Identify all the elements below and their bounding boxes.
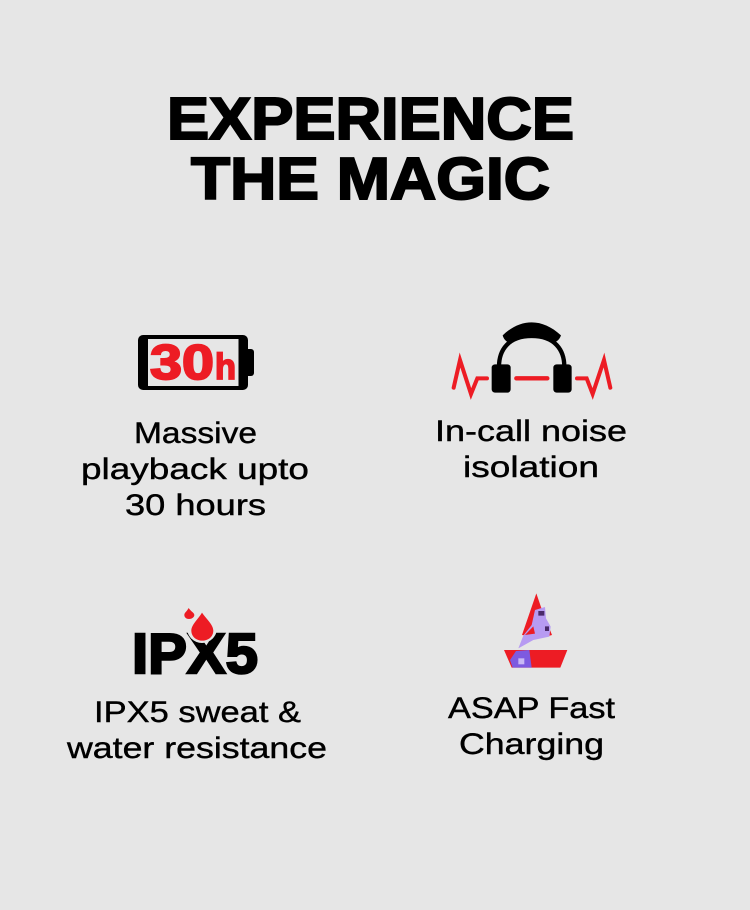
icon: battery 30h: 30 bbox=[150, 336, 214, 390]
text: in-call noise isolation bbox=[435, 415, 627, 484]
text: in-call noise isolation: isolation bbox=[463, 451, 599, 484]
text: ipx5 sweat and water resistance: water resistance bbox=[66, 732, 327, 765]
icon: battery 30h: h bbox=[215, 346, 236, 387]
icon: ASAP fast charging bbox=[504, 593, 567, 668]
title: EXPERIENCE bbox=[167, 86, 574, 152]
text: asap fast charging: ASAP Fast bbox=[448, 692, 616, 725]
icon: battery 30h bbox=[138, 335, 254, 390]
text: in-call noise isolation: In-call noise bbox=[435, 415, 627, 448]
title: THE MAGIC bbox=[191, 146, 550, 212]
panel: 30 hour playback bbox=[81, 335, 309, 522]
text: massive playback: 30 hours bbox=[125, 489, 266, 522]
text: massive playback: playback upto bbox=[81, 453, 309, 486]
title bbox=[167, 86, 574, 212]
text: asap fast charging bbox=[448, 692, 616, 761]
panel: water resistance bbox=[66, 608, 327, 765]
text: massive playback bbox=[81, 417, 309, 522]
icon: IPX5 with water drops: IPX5 bbox=[132, 622, 258, 686]
icon: headphones with sound waves bbox=[454, 322, 610, 394]
text: asap fast charging: Charging bbox=[459, 728, 604, 761]
text: massive playback: Massive bbox=[134, 417, 257, 450]
text: ipx5 sweat and water resistance: IPX5 sweat & bbox=[94, 696, 301, 729]
panel: noise isolation bbox=[435, 322, 627, 484]
text: ipx5 sweat and water resistance bbox=[66, 696, 327, 765]
panel: fast charging bbox=[448, 593, 616, 761]
